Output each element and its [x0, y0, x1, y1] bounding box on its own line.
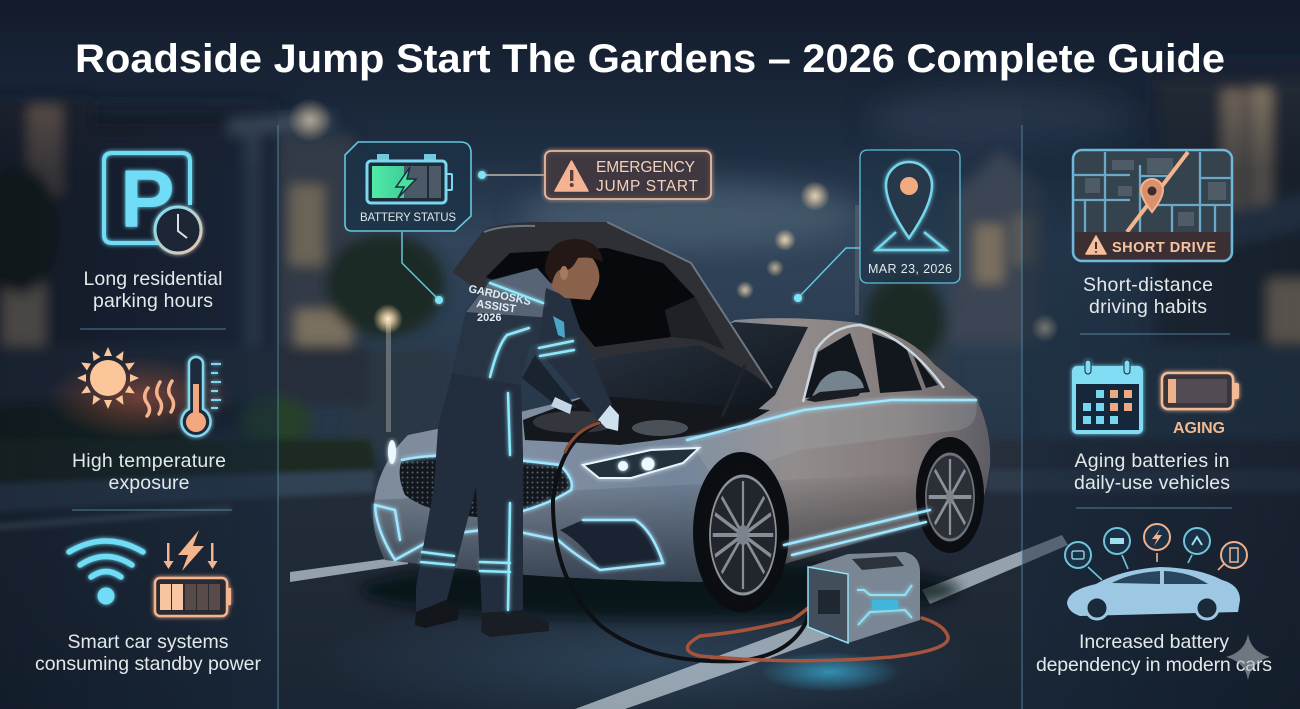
head [545, 239, 603, 300]
shoulder badge [553, 316, 565, 338]
car [360, 318, 990, 620]
warning strip [1075, 232, 1230, 259]
road markings [290, 535, 1068, 709]
icon: route [1127, 152, 1188, 232]
grille [400, 455, 572, 518]
label: consuming standby power [35, 653, 262, 675]
icon: parking sign with clock [104, 153, 201, 253]
label: dependency in modern cars [1036, 654, 1272, 676]
callout: battery status [345, 142, 471, 231]
label [596, 159, 699, 195]
icon: lightning bolt and arrows [164, 530, 218, 571]
front wheel [703, 463, 783, 607]
mechanic [415, 239, 619, 637]
jacket lettering [467, 283, 532, 324]
label: Aging batteries in [1074, 450, 1230, 472]
connector: location to car [794, 248, 860, 302]
torso [452, 268, 566, 385]
trousers [416, 373, 523, 620]
jumper cables [553, 423, 948, 661]
label: Long residential [84, 268, 222, 290]
heat haze [45, 356, 235, 440]
connector: battery status to engine [402, 232, 443, 304]
icon: map: SHORT DRIVE [1112, 240, 1216, 256]
jacket lettering: GARDOSKS [467, 283, 532, 308]
label [1083, 274, 1213, 318]
engine bay [523, 395, 770, 445]
street lamps [288, 98, 1059, 432]
date: MAR 23, 2026 [868, 262, 952, 276]
item: aging batteries [1072, 360, 1239, 494]
label [35, 631, 262, 675]
label [84, 268, 222, 312]
side panel tint: right [1022, 106, 1300, 709]
icon: map pin [876, 162, 946, 250]
item: modern car dependency [1036, 524, 1272, 676]
label: EMERGENCY [596, 159, 695, 176]
glove [598, 405, 619, 431]
icon: low battery [155, 578, 231, 616]
rear wheel [916, 437, 984, 553]
windshield [581, 322, 808, 412]
item: standby power [35, 530, 262, 675]
label: JUMP START [596, 178, 699, 195]
label: Increased battery [1079, 631, 1229, 653]
mirror [812, 371, 864, 396]
body [373, 318, 990, 582]
label [1074, 450, 1230, 494]
icon: pin [1141, 179, 1163, 212]
connector: emergency callout [478, 171, 545, 179]
portable jump pack [808, 552, 920, 643]
yoke [466, 268, 563, 318]
title: Roadside Jump Start The Gardens – 2026 Complete Guide [75, 37, 1225, 81]
wheel arch front [693, 452, 789, 612]
label: parking hours [93, 290, 213, 312]
lower intake [560, 520, 663, 570]
callout: location and date [860, 150, 960, 283]
boots [415, 600, 459, 628]
icon: heat waves [145, 381, 174, 416]
label: driving habits [1089, 296, 1207, 318]
icon: car with system circles [1065, 524, 1247, 619]
icon: battery charging [367, 154, 452, 203]
jacket lettering: 2026 [477, 312, 501, 324]
label: exposure [108, 472, 190, 494]
icon: sun [77, 347, 139, 409]
headlight lamps [388, 440, 654, 471]
icon: calendar [1072, 360, 1143, 434]
label: Short-distance [1083, 274, 1213, 296]
item: short drive [1073, 150, 1232, 318]
road sheen [310, 590, 990, 709]
side windows [805, 333, 938, 398]
label: High temperature [72, 450, 226, 472]
far arm [522, 355, 577, 408]
icon: thermometer [182, 357, 221, 436]
side panel tint: left [0, 110, 278, 709]
headlight [583, 448, 699, 478]
icon: wifi [69, 541, 143, 604]
icon: parking sign with clock: P [120, 154, 175, 245]
aging text: AGING [1173, 420, 1225, 437]
item: long parking hours [84, 153, 222, 312]
label: Smart car systems [68, 631, 229, 653]
icon: watermark star [1226, 634, 1270, 680]
neon body accents [375, 400, 976, 570]
jacket lettering: ASSIST [476, 298, 517, 316]
label: daily-use vehicles [1074, 472, 1230, 494]
near arm [538, 288, 612, 420]
open hood [452, 222, 772, 417]
callout: emergency jump start [545, 151, 711, 199]
label [72, 450, 226, 494]
icon: warning triangle [555, 161, 588, 191]
label [1036, 631, 1272, 676]
icon: aging battery [1162, 373, 1239, 409]
car shadow [360, 560, 960, 620]
item: high temperature [45, 347, 235, 494]
icon: map [1073, 150, 1232, 261]
label: BATTERY STATUS [360, 212, 456, 224]
panel dividers [72, 125, 1232, 709]
neon reflective strips [421, 283, 574, 610]
